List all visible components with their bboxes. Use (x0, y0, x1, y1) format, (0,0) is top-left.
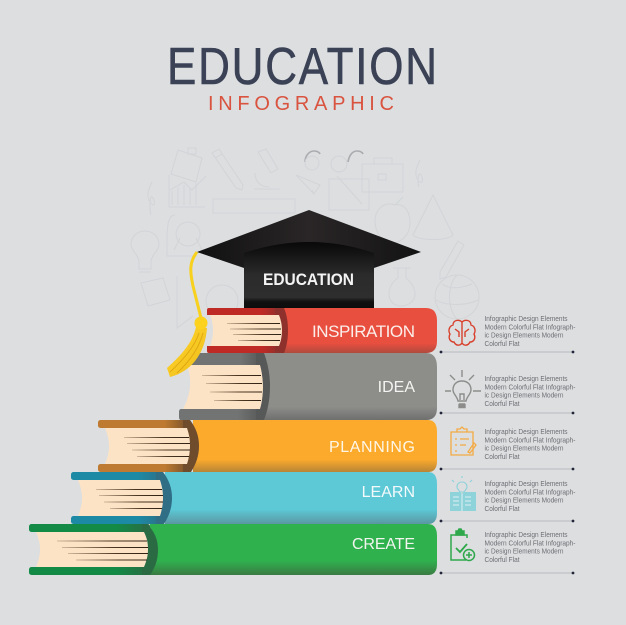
doodle: bar chart (169, 175, 206, 207)
page lines (124, 437, 190, 457)
book: planning (98, 420, 437, 472)
doodle: certificate board (171, 148, 202, 182)
description text: Colorful Flat (484, 454, 520, 461)
description text: Modern Colorful Flat Infograph- (484, 540, 576, 547)
doodle: light bulb (131, 231, 159, 272)
doodle: apple (375, 197, 410, 243)
page lines (202, 375, 262, 401)
description text: ic Design Elements Modern (484, 498, 564, 505)
step 4: learn info (440, 476, 576, 522)
description text: Infographic Design Elements (484, 481, 568, 488)
doodle: cone (413, 195, 453, 240)
title: EDUCATION (167, 38, 437, 96)
page lines (57, 540, 148, 560)
doodle: treble clef (416, 160, 422, 187)
step 2: idea info (440, 370, 576, 414)
divider (440, 468, 574, 470)
description text: ic Design Elements Modern (484, 333, 564, 340)
description text: Colorful Flat (484, 401, 520, 408)
description text: ic Design Elements Modern (484, 549, 564, 556)
graduation cap (197, 210, 421, 308)
cap body (244, 242, 374, 308)
doodle: flask (389, 268, 415, 306)
icon: light bulb (445, 370, 481, 408)
page lines (227, 323, 281, 341)
doodle: briefcase (362, 158, 403, 192)
page lines (96, 489, 163, 509)
description text (484, 429, 576, 461)
icon: clipboard with plus (451, 529, 474, 560)
doodle: clock (206, 285, 238, 317)
description text: Modern Colorful Flat Infograph- (484, 489, 576, 496)
description text: Infographic Design Elements (484, 316, 568, 323)
icon: brain (449, 320, 475, 345)
description text: Colorful Flat (484, 341, 520, 348)
cap board (197, 210, 421, 268)
book: create (29, 524, 437, 575)
book: learn: LEARN (362, 484, 415, 501)
book: inspiration: INSPIRATION (312, 322, 415, 341)
doodle: clef left (148, 182, 154, 215)
doodle: clipboard (141, 278, 170, 306)
doodle: award (167, 215, 202, 256)
book: idea (179, 353, 437, 420)
description text: Infographic Design Elements (484, 376, 568, 383)
description text: Modern Colorful Flat Infograph- (484, 437, 576, 444)
doodle: paper plane (296, 175, 320, 194)
description text: Modern Colorful Flat Infograph- (484, 384, 576, 391)
doodle: microscope (254, 149, 280, 189)
description text (484, 481, 576, 513)
icon: clipboard (451, 427, 476, 455)
description text (484, 376, 576, 408)
doodle: glasses (305, 151, 363, 162)
doodle: pencil right (440, 241, 464, 279)
description text: Colorful Flat (484, 506, 520, 513)
step 1: inspiration info (440, 316, 576, 353)
description text: Infographic Design Elements (484, 532, 568, 539)
step 5: create info (440, 529, 576, 574)
step 3: planning info (440, 427, 576, 470)
doodle: glasses lenses (305, 156, 347, 172)
divider (440, 572, 574, 574)
book: learn (71, 472, 437, 524)
divider (440, 412, 574, 414)
cap band text: EDUCATION (263, 271, 354, 289)
description text: Colorful Flat (484, 557, 520, 564)
description text (484, 316, 576, 348)
book: planning: PLANNING (329, 439, 415, 456)
book: create: CREATE (352, 536, 415, 553)
divider (440, 351, 574, 353)
description text: ic Design Elements Modern (484, 446, 564, 453)
doodle: triangle ruler (177, 276, 193, 328)
doodle: pencil (212, 149, 243, 190)
description text: Modern Colorful Flat Infograph- (484, 324, 576, 331)
background doodle icons (131, 148, 479, 328)
subtitle: INFOGRAPHIC (208, 93, 394, 115)
doodle: ruler (213, 199, 295, 213)
divider (440, 520, 574, 522)
book: inspiration (207, 308, 437, 353)
doodle: globe (435, 275, 479, 319)
description text (484, 532, 576, 564)
doodle: spring and notebook (329, 176, 369, 210)
description text: ic Design Elements Modern (484, 393, 564, 400)
description text: Infographic Design Elements (484, 429, 568, 436)
icon: open book with bulb (450, 476, 476, 511)
cap tassel (167, 252, 208, 377)
book: idea: IDEA (378, 379, 415, 396)
